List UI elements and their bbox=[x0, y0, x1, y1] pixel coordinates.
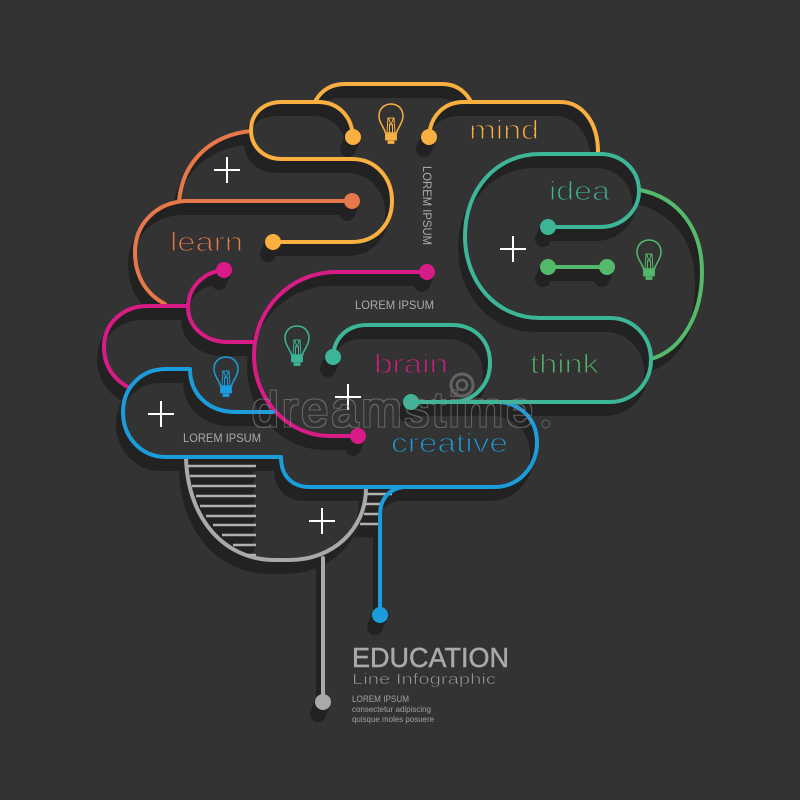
lower left label: LOREM IPSUM bbox=[183, 431, 261, 445]
title: education: EDUCATION bbox=[352, 642, 509, 673]
brain outline lines bbox=[104, 84, 702, 710]
icon: green bulb bbox=[637, 240, 661, 280]
word: brain: brain bbox=[374, 349, 448, 379]
watermark: dreamstime bbox=[252, 384, 533, 437]
magenta brain section bbox=[104, 262, 435, 444]
plus marks bbox=[148, 157, 526, 534]
body text bbox=[352, 694, 434, 724]
orange learn section bbox=[135, 131, 360, 304]
icon: yellow bulb bbox=[379, 104, 403, 144]
center label: LOREM IPSUM bbox=[355, 298, 434, 312]
body text: LOREM IPSUM bbox=[352, 694, 409, 705]
word: learn: learn bbox=[170, 227, 243, 257]
word: idea: idea bbox=[549, 176, 611, 206]
icon: teal bulb bbox=[285, 326, 309, 366]
word: think: think bbox=[530, 349, 600, 379]
icon: blue bulb bbox=[214, 357, 238, 396]
word: mind: mind bbox=[469, 115, 539, 145]
yellow mind section bbox=[251, 84, 598, 250]
blue creative section bbox=[123, 369, 537, 623]
body text: consectetur adipiscing bbox=[352, 704, 431, 714]
title block bbox=[352, 642, 509, 724]
green think section bbox=[540, 190, 702, 359]
subtitle: Line Infographic bbox=[352, 671, 497, 688]
vertical label: LOREM IPSUM bbox=[420, 166, 434, 245]
word: creative: creative bbox=[391, 428, 508, 458]
teal idea section bbox=[325, 154, 651, 410]
body text: quisque moles posuere bbox=[352, 714, 434, 724]
gray brain stem section bbox=[186, 458, 392, 710]
